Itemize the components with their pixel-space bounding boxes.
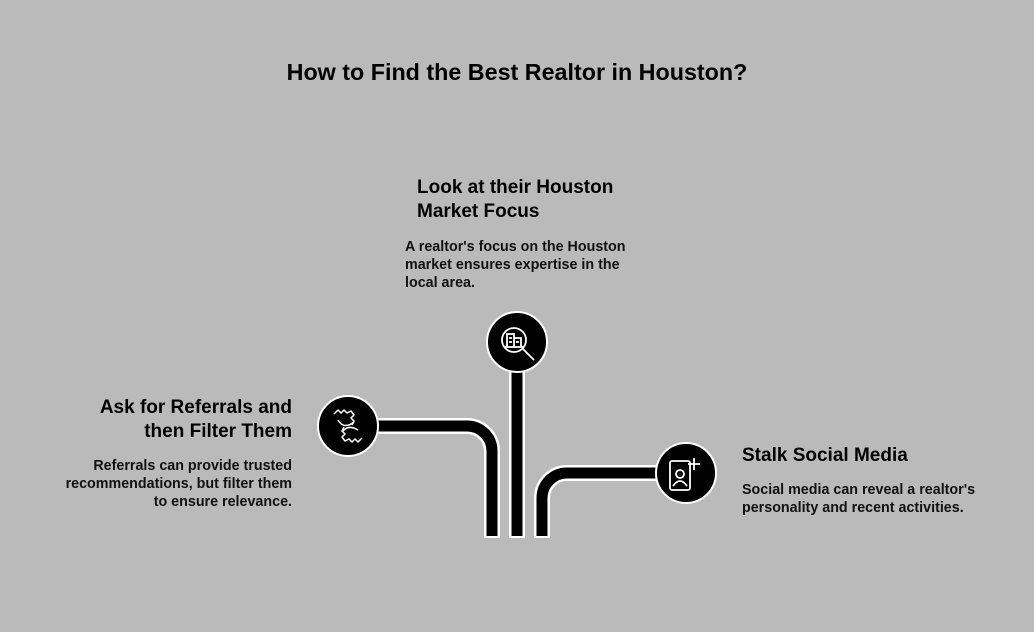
body: referrals: Referrals can provide trusted (93, 458, 292, 474)
body: social media (742, 482, 975, 516)
heading: market focus (417, 177, 613, 222)
heading: referrals (100, 397, 292, 442)
heading: market focus: Look at their Houston (417, 177, 613, 198)
text block: social media (742, 445, 975, 516)
text block: market focus (405, 177, 626, 291)
heading: referrals: then Filter Them (144, 421, 292, 442)
heading: referrals: Ask for Referrals and (100, 397, 292, 418)
body: social media: personality and recent activities. (742, 500, 964, 516)
title: How to Find the Best Realtor in Houston? (287, 59, 747, 85)
heading: social media: Stalk Social Media (742, 445, 908, 466)
body: market focus: market ensures expertise in the (405, 257, 620, 273)
body: referrals: to ensure relevance. (154, 494, 292, 510)
icon: handshake (318, 396, 378, 456)
connector: left branch (376, 426, 492, 538)
connector: middle (509, 370, 525, 538)
icon: building magnifier (487, 312, 547, 372)
body: referrals: recommendations, but filter them (66, 476, 292, 492)
body: market focus: local area. (405, 275, 475, 291)
heading: market focus: Market Focus (417, 201, 539, 222)
text block: referrals (66, 397, 292, 510)
body: referrals (66, 458, 292, 510)
body: market focus (405, 239, 626, 291)
body: market focus: A realtor's focus on the Houston (405, 239, 626, 255)
body: social media: Social media can reveal a realtor's (742, 482, 975, 498)
icon: social profile (656, 443, 716, 503)
connector: right branch (542, 473, 660, 538)
